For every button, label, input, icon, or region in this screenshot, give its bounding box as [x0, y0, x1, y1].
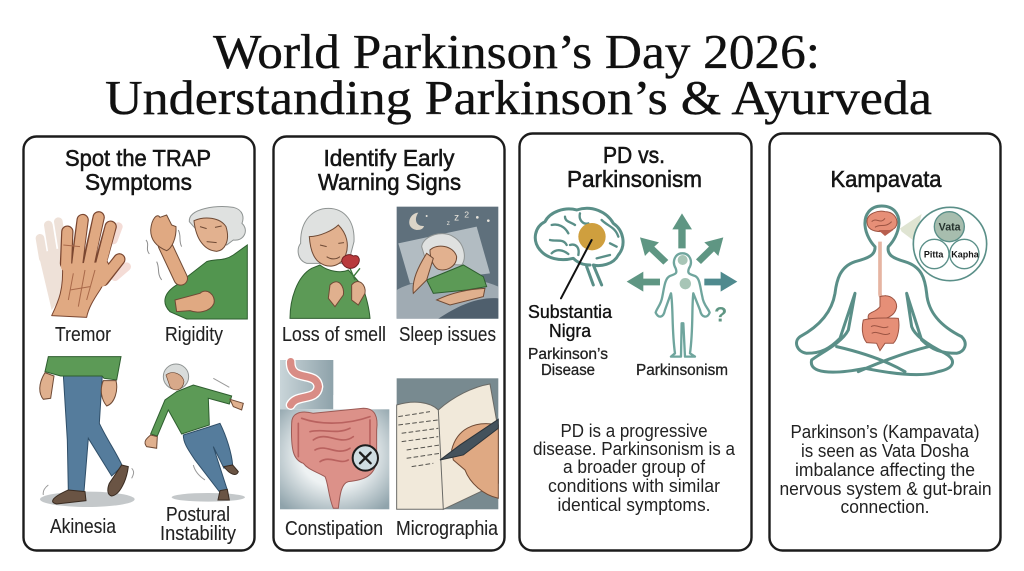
label: Substantia Nigra: [528, 301, 613, 341]
icon: sleep issues: [397, 207, 498, 319]
label: Postural Instability: Postural: [166, 504, 230, 526]
text: Kampavata explanation: Parkinson’s (Kampavata): [790, 422, 980, 442]
title: Understanding Parkinson’s & Ayurveda: [105, 70, 932, 125]
title: World Parkinson’s Day 2026:: [213, 24, 820, 79]
label: Parkinson's Disease: [528, 346, 608, 379]
icon: brain with substantia nigra: [535, 208, 623, 298]
text: PD explanation: PD is a progressive: [560, 421, 708, 441]
label: Constipation: Constipation: [285, 518, 383, 540]
icon: sleep issues: z: [454, 213, 459, 224]
label: Kapha: Kapha: [951, 249, 980, 259]
panel: TRAP symptoms: [24, 136, 254, 550]
icon: radiating arrows: [627, 213, 737, 292]
panel: PD vs Parkinsonism: [520, 134, 752, 550]
icon: intestines constipation: [280, 360, 389, 509]
panel: Kampavata: [770, 134, 1000, 550]
icon: meditating figure with gut-brain axis: [797, 206, 987, 375]
label: Akinesia: Akinesia: [50, 516, 117, 538]
label: Parkinson's Disease: Parkinson’s: [528, 346, 608, 363]
text: Kampavata explanation: [780, 422, 992, 517]
label: Loss of smell: Loss of smell: [282, 324, 386, 346]
text: PD explanation: a broader group of: [563, 457, 706, 477]
heading: PD vs. Parkinsonism: Parkinsonism: [567, 166, 702, 192]
icon: sleep issues: z: [447, 220, 450, 227]
icon: akinesia walking legs: [40, 357, 135, 507]
label: Rigidity: Rigidity: [165, 324, 223, 346]
label: Micrographia: Micrographia: [396, 518, 499, 540]
label: Sleep issues: Sleep issues: [399, 324, 496, 346]
text: Kampavata explanation: connection.: [840, 497, 930, 517]
text: Kampavata explanation: nervous system & gut-brain: [780, 479, 992, 499]
text: Kampavata explanation: imbalance affecting the: [795, 460, 975, 480]
heading: Spot the TRAP Symptoms: Spot the TRAP: [65, 145, 211, 171]
label: Parkinson's Disease: Disease: [541, 362, 595, 379]
text: PD explanation: disease. Parkinsonism is a: [533, 439, 736, 459]
label: Substantia Nigra: Nigra: [549, 320, 592, 341]
label: Postural Instability: Instability: [160, 523, 236, 545]
text: Kampavata explanation: is seen as Vata Dosha: [801, 441, 970, 461]
label: Pitta: Pitta: [924, 249, 944, 259]
text: PD explanation: conditions with similar: [548, 476, 720, 496]
icon: tremor hand: [38, 217, 127, 317]
heading: Identify Early Warning Signs: Identify Early: [324, 145, 455, 171]
label: Parkinsonism: Parkinsonism: [636, 362, 728, 379]
heading: PD vs. Parkinsonism: PD vs.: [603, 142, 665, 168]
label: Substantia Nigra: Substantia: [528, 301, 613, 322]
icon: sleep issues: 2: [464, 209, 469, 219]
icon: human body with question mark: [656, 253, 727, 357]
icon: rigidity woman: [146, 207, 247, 319]
text: PD explanation: [533, 421, 736, 515]
label: Vata: Vata: [939, 221, 961, 233]
heading: Kampavata: Kampavata: [830, 166, 942, 192]
icon: postural instability figure: [145, 364, 245, 502]
label: Tremor: Tremor: [55, 324, 111, 346]
label: Postural Instability: [160, 504, 236, 545]
text: PD explanation: identical symptoms.: [558, 495, 710, 515]
title: [105, 24, 932, 125]
icon: human body with question mark: ?: [714, 303, 727, 327]
heading: Spot the TRAP Symptoms: [65, 145, 211, 195]
heading: PD vs. Parkinsonism: [567, 142, 702, 192]
icon: woman smelling flower: [290, 208, 370, 318]
heading: Spot the TRAP Symptoms: Symptoms: [85, 169, 192, 195]
heading: Identify Early Warning Signs: Warning Signs: [318, 169, 461, 195]
panel: early warning signs: [274, 136, 504, 550]
icon: micrographia: [397, 378, 498, 509]
heading: Identify Early Warning Signs: [318, 145, 461, 195]
